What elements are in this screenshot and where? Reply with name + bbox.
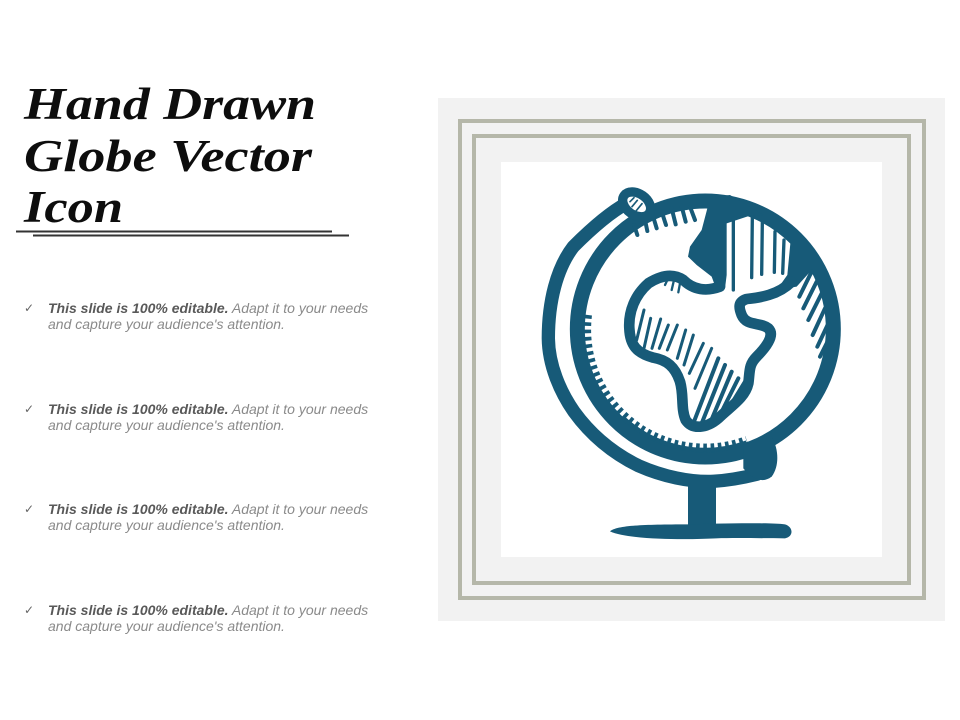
africa outline bbox=[629, 276, 792, 427]
bullet 2: This slide is 100% editable. Adapt it to your needs bbox=[48, 401, 368, 417]
title: Icon bbox=[23, 182, 123, 232]
bullet 2: ✓ bbox=[24, 402, 34, 416]
teeth along lower edge bbox=[587, 315, 747, 448]
thicker lower band bbox=[623, 418, 747, 450]
bullet 3: ✓ bbox=[24, 502, 34, 516]
icon: hand drawn globe bbox=[542, 187, 841, 540]
bullet 2: and capture your audience's attention. bbox=[48, 417, 285, 433]
base bbox=[610, 523, 792, 539]
bullet 1: This slide is 100% editable. Adapt it to your needs bbox=[48, 300, 368, 316]
bullet 2 bbox=[24, 401, 368, 433]
picture frame bbox=[438, 98, 945, 621]
knob bbox=[618, 187, 655, 222]
teeth along upper edge bbox=[634, 207, 695, 235]
stem bbox=[688, 480, 716, 525]
eastern stripes bbox=[799, 272, 828, 357]
title: Hand Drawn bbox=[23, 79, 316, 129]
bullet 4: This slide is 100% editable. Adapt it to your needs bbox=[48, 602, 368, 618]
stand joint bbox=[743, 437, 777, 480]
title: Globe Vector bbox=[24, 131, 313, 181]
bullet 4: ✓ bbox=[24, 603, 34, 617]
northern stripes bbox=[733, 217, 784, 290]
bullet 1: ✓ bbox=[24, 301, 34, 315]
bullet 3: and capture your audience's attention. bbox=[48, 517, 285, 533]
bullet 1: and capture your audience's attention. bbox=[48, 316, 285, 332]
bullet 3 bbox=[24, 501, 368, 533]
bullet 3: This slide is 100% editable. Adapt it to your needs bbox=[48, 501, 368, 517]
dark northern mass bbox=[688, 195, 763, 288]
bullet 4 bbox=[24, 602, 368, 634]
bullet 1 bbox=[24, 300, 368, 332]
africa stripes bbox=[637, 310, 712, 388]
title bbox=[16, 79, 349, 236]
globe sphere bbox=[577, 201, 833, 457]
bullet 4: and capture your audience's attention. bbox=[48, 618, 285, 634]
eastern wedge bbox=[777, 240, 812, 290]
stand arm bbox=[548, 203, 757, 481]
